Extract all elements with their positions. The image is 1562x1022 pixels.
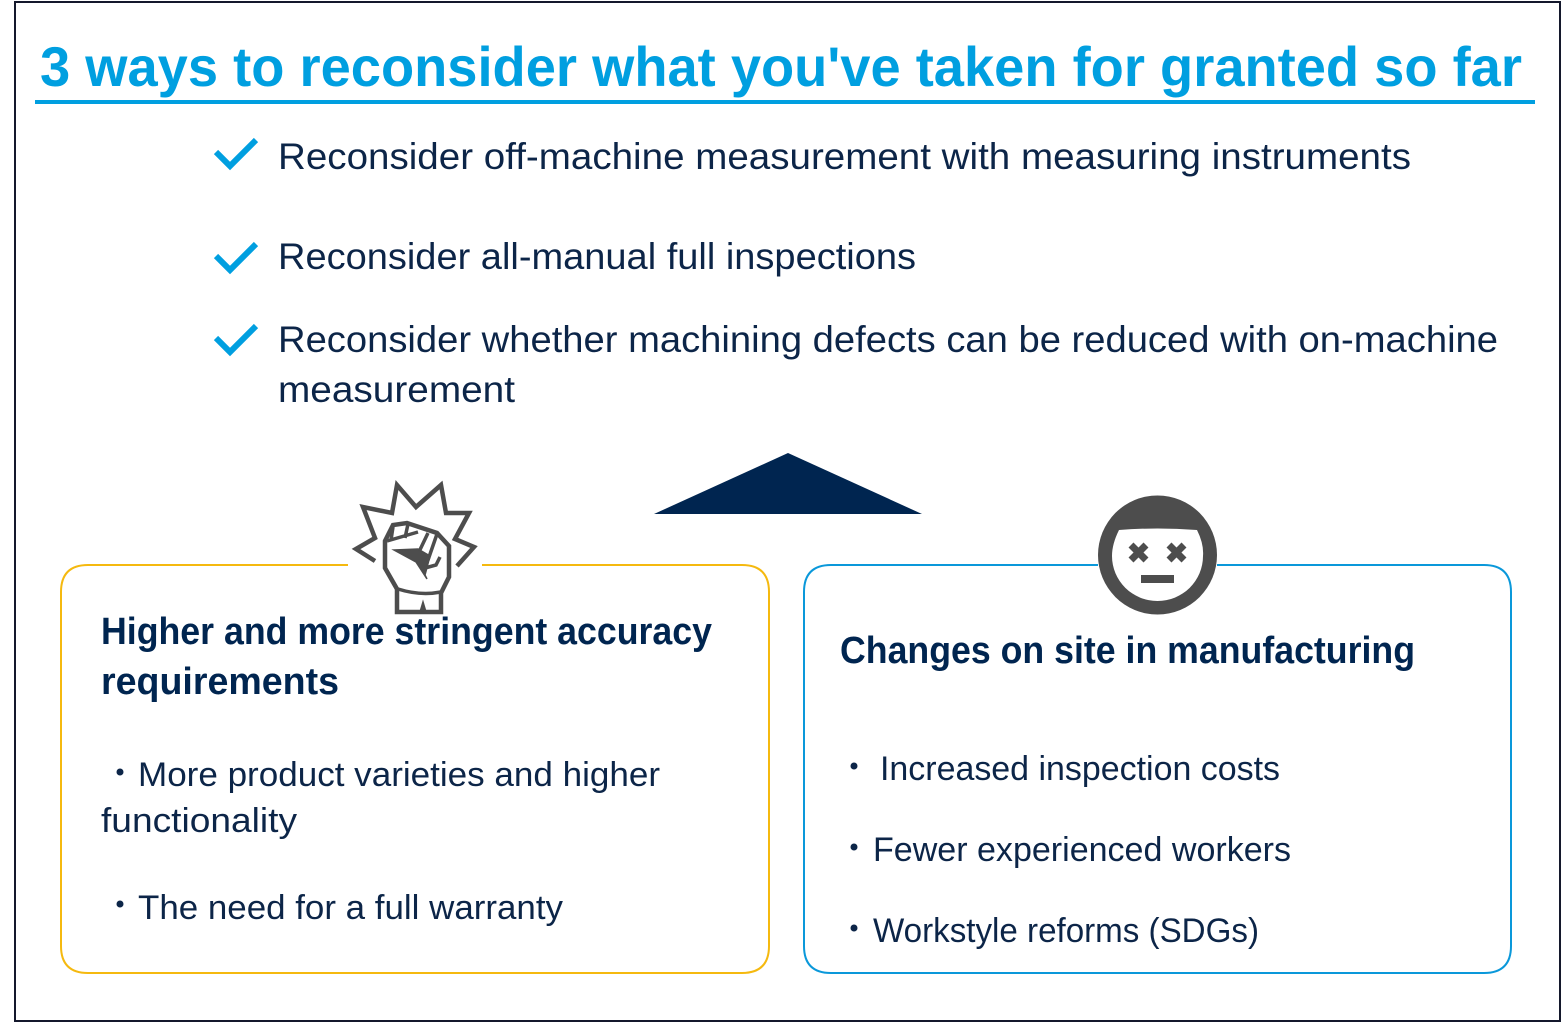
- panel heading: [101, 611, 712, 703]
- bullet list: The need for a full warranty: [138, 889, 563, 927]
- bullet list: functionality: [101, 802, 297, 840]
- bullet list: More product varieties and higher: [138, 756, 660, 794]
- panel: changes on site: [804, 565, 1511, 973]
- check item 3: Reconsider whether machining defects can be reduced with on-machine: [278, 319, 1498, 360]
- icon: fist with burst: [356, 485, 474, 612]
- icon: check 1: [216, 140, 256, 166]
- bullet list: [850, 750, 1291, 950]
- title: 3 ways to reconsider what you've taken for granted so far: [40, 35, 1522, 98]
- icon: check 2: [216, 244, 256, 270]
- icon: check 3: [216, 326, 256, 352]
- check item 1: Reconsider off-machine measurement with measuring instruments: [278, 136, 1411, 177]
- bullet list: Increased inspection costs: [880, 750, 1280, 788]
- check item 3: measurement: [278, 369, 516, 410]
- check item 2: Reconsider all-manual full inspections: [278, 236, 916, 277]
- bullet list: [101, 756, 660, 927]
- checklist: [216, 136, 1498, 410]
- panel heading: requirements: [101, 661, 339, 703]
- bullet list: Workstyle reforms (SDGs): [873, 912, 1259, 950]
- panel heading: Changes on site in manufacturing: [840, 630, 1415, 672]
- icon: dizzy face: [1098, 496, 1217, 614]
- panel: accuracy requirements: [61, 565, 769, 973]
- panel heading: Higher and more stringent accuracy: [101, 611, 712, 653]
- triangle arrow: [654, 453, 922, 514]
- check item 3: [278, 319, 1498, 410]
- bullet list: Fewer experienced workers: [873, 831, 1291, 869]
